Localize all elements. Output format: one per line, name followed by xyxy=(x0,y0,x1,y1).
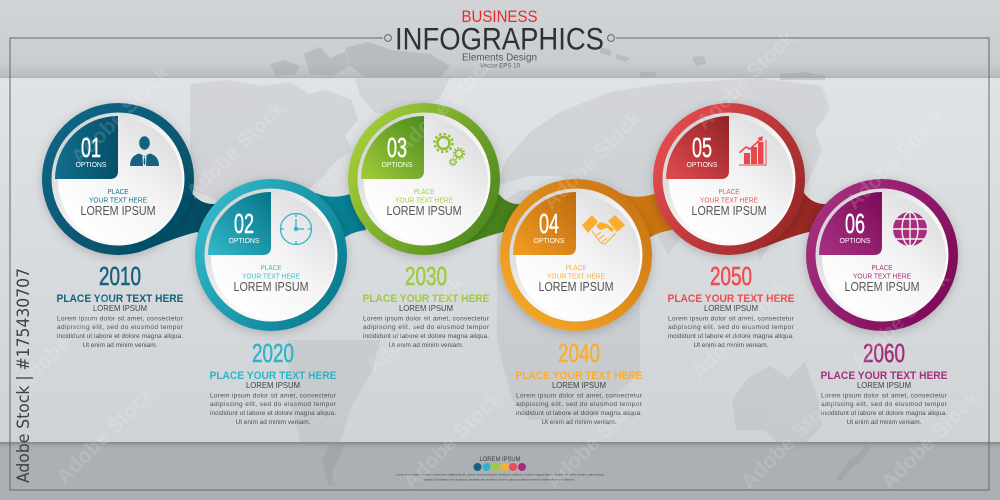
panel: step 03 circle: 03 xyxy=(387,132,407,163)
stock watermarks: Adobe Stock xyxy=(52,382,159,489)
text block: 2050: 2050 xyxy=(710,261,752,291)
text block: 2060: incididunt ut labore et dolore magna aliqua. xyxy=(821,410,947,417)
stock watermarks: Adobe Stock xyxy=(182,97,289,204)
text block: 2060: adipiscing elit, sed do eiusmod tempor xyxy=(821,401,948,408)
text block: 2060: PLACE YOUR TEXT HERE xyxy=(820,370,948,382)
footer fine print: pariatur. Excepteur sint occaecat cupidatat non proident, sunt in culpa qui officia deserunt mollit anim id est laborum. xyxy=(424,478,575,482)
title: business: BUSINESS xyxy=(462,7,538,26)
stock watermarks: Adobe Stock xyxy=(842,107,949,214)
panel: step 03 circle: LOREM IPSUM xyxy=(386,203,462,218)
panel: step 05 circle: OPTIONS xyxy=(686,160,718,169)
text block: 2020: Ut enim ad minim veniam. xyxy=(236,419,311,426)
panel: step 05 circle xyxy=(653,103,805,255)
stock watermarks: Adobe Stock xyxy=(692,27,799,134)
text block: 2020: incididunt ut labore et dolore magna aliqua. xyxy=(210,410,336,417)
panel: step 04 circle: 04 xyxy=(539,208,559,239)
panel: step 02 circle: PLACE xyxy=(260,263,282,272)
subtitle: Elements Design xyxy=(462,52,537,64)
text block: 2030: Lorem ipsum dolor sit amet, consectetur xyxy=(363,316,490,322)
panel: step 02 circle xyxy=(195,179,347,331)
text block: 2060: Ut enim ad minim veniam. xyxy=(846,419,922,426)
icon: businessman xyxy=(130,136,159,166)
stock watermarks: Adobe Stock xyxy=(542,387,649,494)
text block: 2030: adipiscing elit, sed do eiusmod tempor xyxy=(363,324,490,331)
panel: step 06 circle: LOREM IPSUM xyxy=(844,279,920,294)
stock watermarks: Adobe Stock xyxy=(392,52,499,159)
stock watermarks: Adobe Stock xyxy=(737,387,844,494)
text block: 2030: Ut enim ad minim veniam. xyxy=(388,342,464,349)
footer fine print: Lorem ipsum dolor sit amet, consectetur adipiscing elit, sed do eiusmod tempor incididunt ut labore et dolore magna aliqua. Ut enim ad minim veniam, quis nostrud xyxy=(396,474,605,476)
panel: step 02 circle: LOREM IPSUM xyxy=(234,279,308,294)
panel: step 05 circle: PLACE xyxy=(718,187,740,196)
panel: step 01 circle: PLACE xyxy=(108,187,129,196)
stock id vertical label: Adobe Stock | #175430707 xyxy=(14,268,34,483)
panel: step 01 circle xyxy=(42,103,194,255)
background: centre panel xyxy=(0,78,1000,442)
stock watermarks: Adobe Stock xyxy=(877,387,984,494)
text block: 2040: PLACE YOUR TEXT HERE xyxy=(516,370,642,382)
text block: 2060 xyxy=(820,338,948,426)
version note: Vector EPS 10 xyxy=(480,62,520,70)
panel: step 03 circle: OPTIONS xyxy=(382,160,413,169)
text block: 2040: LOREM IPSUM xyxy=(552,380,606,390)
panel: step 02 circle: OPTIONS xyxy=(228,236,260,245)
text block: 2010: LOREM IPSUM xyxy=(93,303,147,313)
text block: 2050: PLACE YOUR TEXT HERE xyxy=(668,293,794,305)
text block: 2030: incididunt ut labore et dolore magna aliqua. xyxy=(363,333,489,340)
stock watermarks: Adobe Stock xyxy=(539,107,646,214)
stock watermarks: Adobe Stock xyxy=(399,387,506,494)
text block: 2060: 2060 xyxy=(863,338,905,368)
panel: step 02 circle: 02 xyxy=(234,208,254,239)
text block: 2030: PLACE YOUR TEXT HERE xyxy=(362,293,490,305)
world map: header islands xyxy=(270,42,870,487)
text block: 2020: adipiscing elit, sed do eiusmod tempor xyxy=(210,401,337,408)
icon: clock xyxy=(280,214,312,244)
text block: 2060: Lorem ipsum dolor sit amet, consectetur xyxy=(821,392,948,400)
panel: step 01 circle: 01 xyxy=(81,132,101,163)
panel: step 05 circle: YOUR TEXT HERE xyxy=(700,196,758,204)
panel: step 03 circle: PLACE xyxy=(414,187,435,196)
footer fine print xyxy=(396,474,605,482)
text block: 2040: Ut enim ad minim veniam. xyxy=(542,419,617,426)
text block: 2050: Ut enim ad minim veniam. xyxy=(694,342,769,349)
panel: step 05 circle: 05 xyxy=(692,132,712,163)
panel: step 06 circle: OPTIONS xyxy=(840,236,871,245)
text block: 2040: incididunt ut labore et dolore magna aliqua. xyxy=(516,410,642,417)
panel: step 06 circle: 06 xyxy=(845,208,865,239)
stock watermarks: Adobe Stock xyxy=(687,277,794,384)
text block: 2010: PLACE YOUR TEXT HERE xyxy=(56,293,184,305)
text block: 2040 xyxy=(516,338,643,426)
world map: continents xyxy=(190,78,830,450)
panel: step 01 circle: LOREM IPSUM xyxy=(80,203,156,218)
connector 2 to 3 xyxy=(300,192,366,241)
icon: handshake xyxy=(582,215,625,244)
panel: step 04 circle: YOUR TEXT HERE xyxy=(547,272,605,280)
icon: globe xyxy=(893,212,927,246)
panel: step 01 circle: YOUR TEXT HERE xyxy=(89,196,147,204)
text block: 2010: adipiscing elit, sed do eiusmod tempor xyxy=(57,324,184,331)
text block: 2050 xyxy=(668,261,795,349)
connector 4 to 5 xyxy=(606,192,672,241)
panel: step 03 circle: YOUR TEXT HERE xyxy=(395,196,453,204)
panel: step 02 circle: YOUR TEXT HERE xyxy=(242,272,300,280)
text block: 2050: adipiscing elit, sed do eiusmod tempor xyxy=(668,324,795,331)
text block: 2040: 2040 xyxy=(558,338,600,368)
stock watermarks: Adobe Stock xyxy=(362,272,469,379)
text block: 2050: LOREM IPSUM xyxy=(704,303,758,313)
panel: step 04 circle: OPTIONS xyxy=(534,236,565,245)
text block: 2020: LOREM IPSUM xyxy=(246,380,300,390)
panel: step 06 circle: YOUR TEXT HERE xyxy=(853,272,911,280)
text block: 2010 xyxy=(56,261,184,349)
text block: 2020 xyxy=(210,338,337,426)
text block: 2040: Lorem ipsum dolor sit amet, consectetur xyxy=(516,392,643,400)
panel: step 01 circle: OPTIONS xyxy=(76,160,107,169)
stock watermarks: Adobe Stock xyxy=(12,287,119,394)
text block: 2010: Ut enim ad minim veniam. xyxy=(82,342,158,349)
panel: step 03 circle xyxy=(348,103,500,255)
background: header band xyxy=(0,0,1000,79)
panel: step 04 circle: LOREM IPSUM xyxy=(538,279,614,294)
text block: 2010: Lorem ipsum dolor sit amet, consectetur xyxy=(57,316,184,322)
text block: 2030: 2030 xyxy=(405,261,447,291)
text block: 2010: incididunt ut labore et dolore magna aliqua. xyxy=(57,333,183,340)
text block: 2010: 2010 xyxy=(99,261,141,291)
colour legend dots xyxy=(474,463,526,471)
connector 5 to 6 xyxy=(762,186,838,250)
panel: step 04 circle: PLACE xyxy=(566,263,587,272)
icon: rising bar chart xyxy=(739,136,766,166)
text block: 2040: adipiscing elit, sed do eiusmod tempor xyxy=(516,401,643,408)
background: bottom band xyxy=(0,441,1000,500)
panel: step 06 circle: PLACE xyxy=(872,263,893,272)
text block: 2050: Lorem ipsum dolor sit amet, consectetur xyxy=(668,316,795,322)
text block: 2020: Lorem ipsum dolor sit amet, consectetur xyxy=(210,392,337,400)
text block: 2020: PLACE YOUR TEXT HERE xyxy=(210,370,336,382)
panel: step 04 circle xyxy=(500,179,652,331)
panel: step 05 circle: LOREM IPSUM xyxy=(692,203,766,218)
footer block xyxy=(396,456,605,482)
connector 3 to 4 xyxy=(456,186,532,250)
footer heading: LOREM IPSUM xyxy=(480,456,520,463)
text block: 2030 xyxy=(362,261,490,349)
icon: gears xyxy=(434,134,464,166)
text block: 2050: incididunt ut labore et dolore magna aliqua. xyxy=(668,333,794,340)
text block: 2030: LOREM IPSUM xyxy=(399,303,453,313)
connector 1 to 2 xyxy=(150,186,226,250)
title block xyxy=(395,7,604,70)
title: infographics: INFOGRAPHICS xyxy=(395,20,604,56)
stock watermarks: Adobe Stock xyxy=(67,62,174,169)
panel: step 06 circle xyxy=(806,179,958,331)
text block: 2060: LOREM IPSUM xyxy=(857,380,911,390)
stock watermarks: Adobe Stock xyxy=(847,267,954,374)
text block: 2020: 2020 xyxy=(252,338,294,368)
